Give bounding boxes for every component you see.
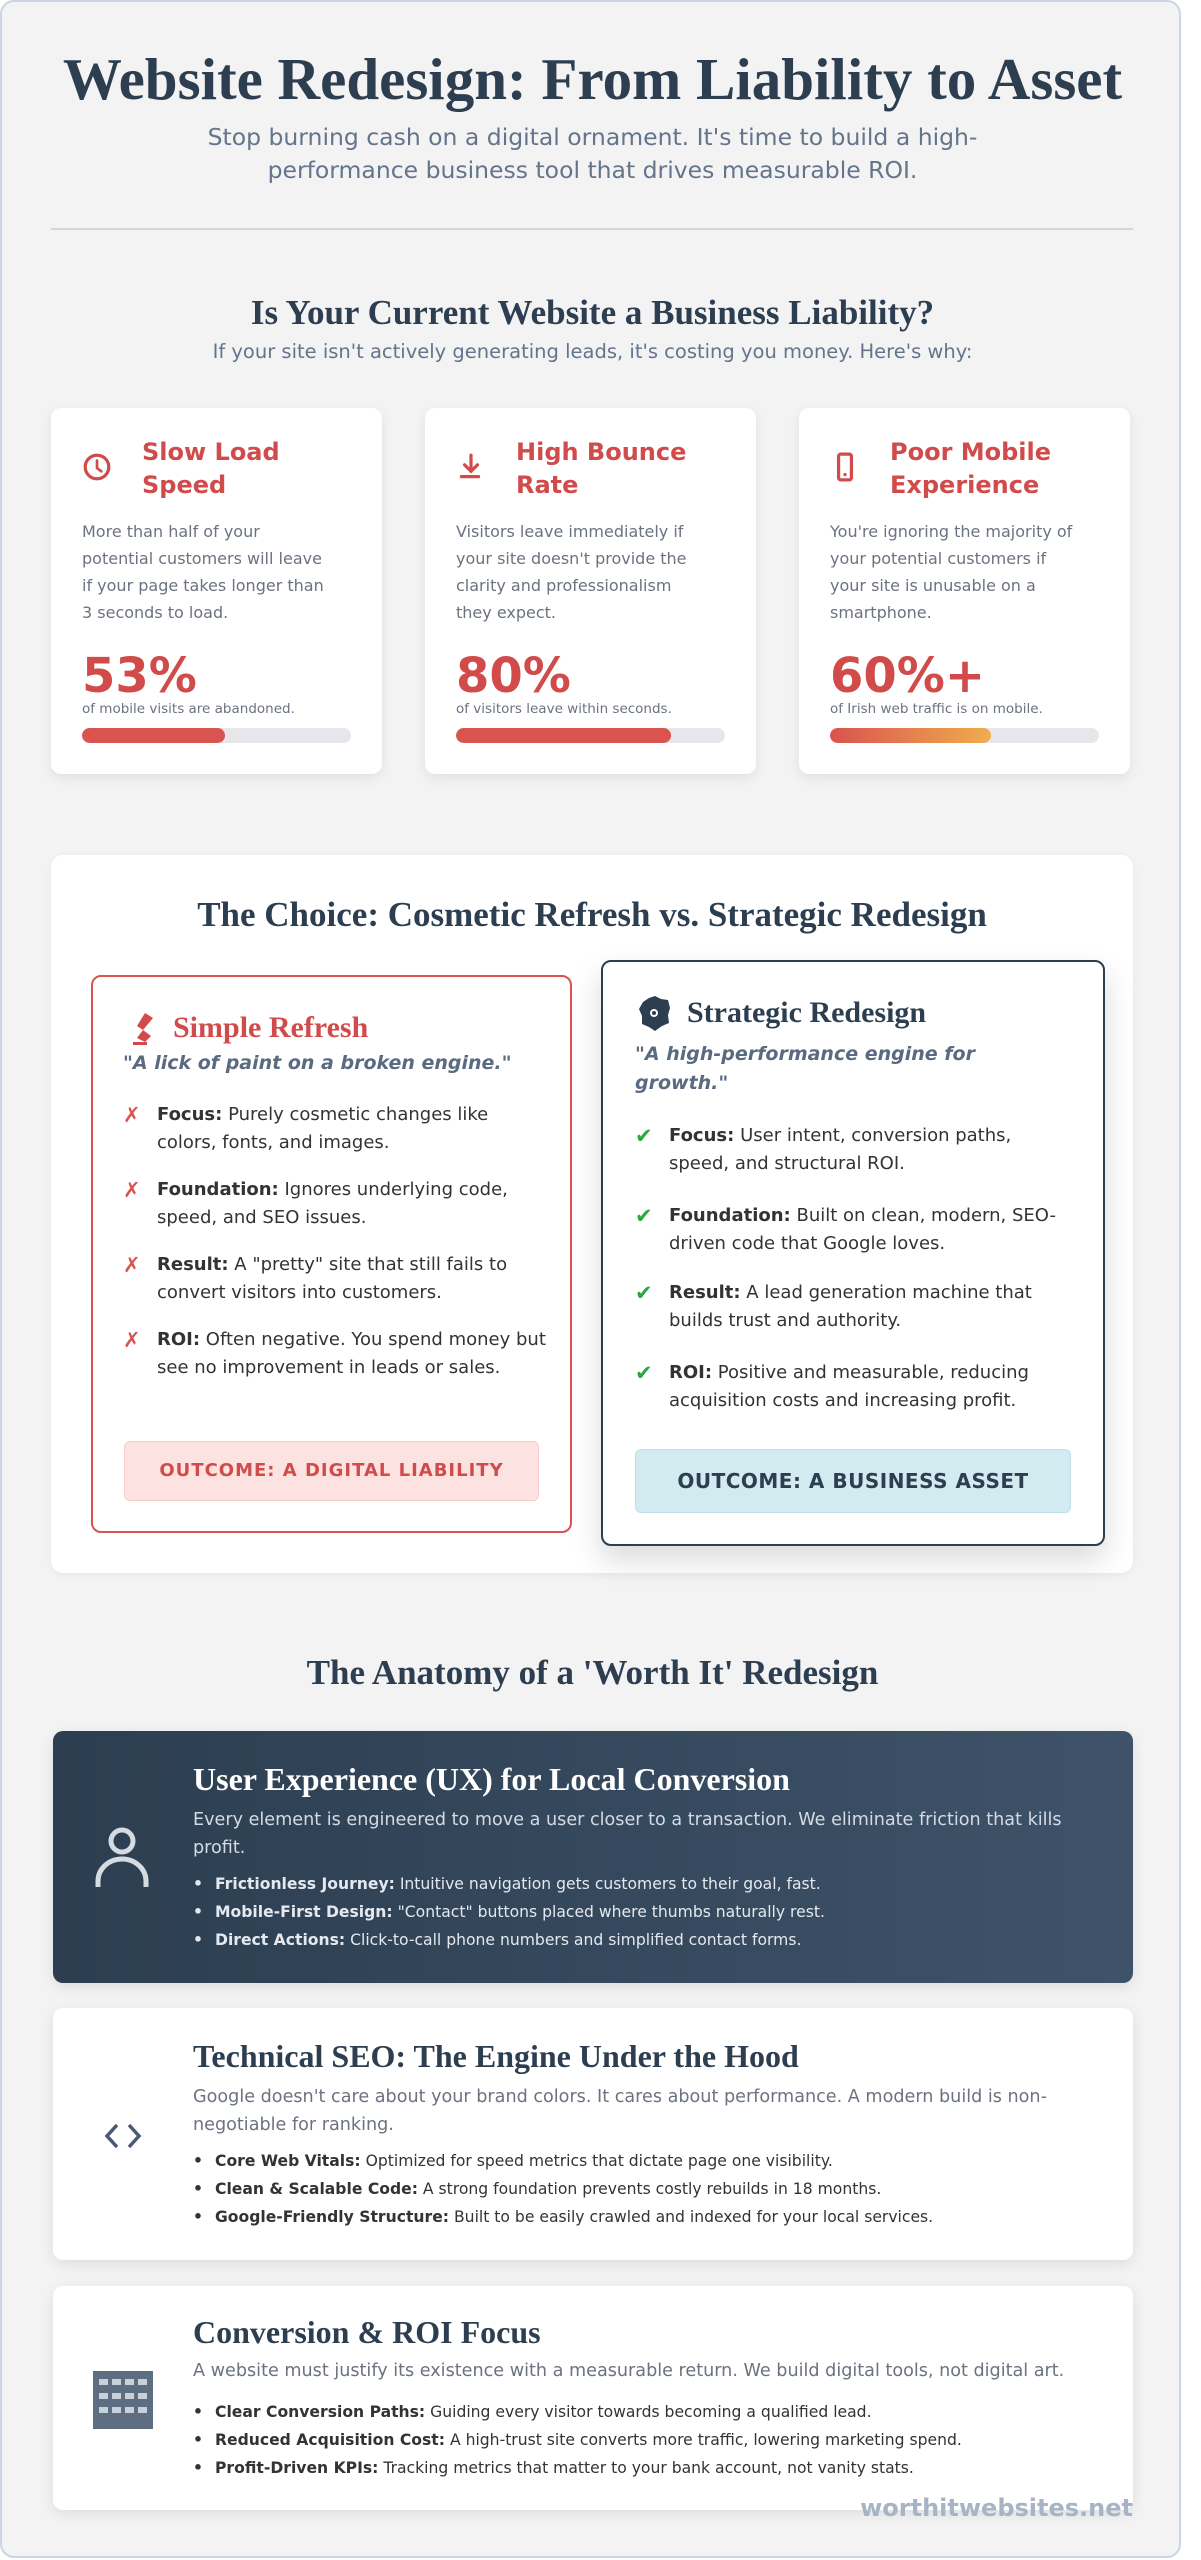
box: strategic redesign: Strategic Redesign — [687, 996, 926, 1029]
item list: ✔ — [635, 1281, 653, 1305]
box: simple refresh — [91, 975, 572, 1533]
card: high bounce rate: 80% — [456, 648, 571, 704]
icon: phone — [836, 452, 854, 482]
feature: technical SEO — [53, 2008, 1133, 2260]
card: high bounce rate: Rate — [516, 471, 578, 499]
card: slow load speed: 53% — [82, 648, 197, 704]
item list — [635, 1124, 1056, 1411]
item list: ✔ — [635, 1361, 653, 1385]
feature: UX — [53, 1731, 1133, 1983]
icon: user — [96, 1828, 148, 1887]
feature: UX: Frictionless Journey: Intuitive navigation gets customers to their goal, fast. — [215, 1875, 821, 1893]
box: simple refresh: "A lick of paint on a broken engine." — [123, 1052, 512, 1074]
card: slow load speed — [51, 408, 382, 774]
feature: UX: User Experience (UX) for Local Conversion — [193, 1761, 790, 1797]
feature: conversion & ROI: Profit-Driven KPIs: Tracking metrics that matter to your bank account, not vanity stats. — [215, 2459, 914, 2477]
outcome: digital liability: OUTCOME: A DIGITAL LIABILITY — [159, 1460, 504, 1481]
box: strategic redesign — [601, 960, 1105, 1546]
item list: ✗ — [123, 1253, 141, 1277]
panel: the choice — [51, 855, 1133, 1573]
card: poor mobile experience: 60%+ — [830, 648, 985, 704]
item list — [123, 1103, 546, 1378]
item list: ✗ — [123, 1103, 141, 1127]
card: slow load speed: Speed — [142, 471, 226, 499]
feature: technical SEO: Clean & Scalable Code: A strong foundation prevents costly rebuilds in 18 months. — [215, 2180, 881, 2198]
icon: building grid — [93, 2371, 153, 2429]
outcome: digital liability — [124, 1441, 539, 1501]
feature: UX: Mobile-First Design: "Contact" buttons placed where thumbs naturally rest. — [215, 1903, 825, 1921]
card: high bounce rate — [425, 408, 756, 774]
card: poor mobile experience: of Irish web traffic is on mobile. — [830, 701, 1043, 717]
box: simple refresh: Simple Refresh — [173, 1011, 368, 1044]
card: poor mobile experience: Poor Mobile — [890, 438, 1051, 466]
feature: conversion & ROI: A website must justify its existence with a measurable return. We build digital tools, not digital art. — [193, 2361, 1064, 2381]
item list: ✔ — [635, 1124, 653, 1148]
item list: ✔ — [635, 1204, 653, 1228]
title: Website Redesign: From Liability to Asset — [63, 46, 1122, 112]
item list: ✗ — [123, 1328, 141, 1352]
section subtext: If your site isn't actively generating leads, it's costing you money. Here's why: — [213, 340, 972, 363]
outcome: business asset — [635, 1449, 1071, 1513]
feature: UX: Every element is engineered to move a user closer to a transaction. We eliminate friction that kills profit. — [193, 1810, 1062, 1858]
item list: ✗ — [123, 1178, 141, 1202]
feature: UX: Direct Actions: Click-to-call phone numbers and simplified contact forms. — [215, 1931, 801, 1949]
item list: Focus: Purely cosmetic changes like colors, fonts, and images. — [157, 1104, 488, 1153]
outcome: business asset: OUTCOME: A BUSINESS ASSET — [677, 1469, 1029, 1493]
item list: Foundation: Ignores underlying code, speed, and SEO issues. — [157, 1179, 508, 1228]
feature: conversion & ROI: Clear Conversion Paths: Guiding every visitor towards becoming a qualified lead. — [215, 2403, 872, 2421]
icon: brush — [133, 1013, 153, 1045]
box: strategic redesign: "A high-performance engine for growth." — [635, 1043, 975, 1094]
item list: Result: A lead generation machine that builds trust and authority. — [669, 1282, 1032, 1331]
card: poor mobile experience: Experience — [890, 471, 1039, 499]
feature: technical SEO: Technical SEO: The Engine Under the Hood — [193, 2038, 799, 2074]
subtitle: Stop burning cash on a digital ornament. It's time to build a high-performance business tool that drives measurable ROI. — [208, 123, 977, 184]
item list: Focus: User intent, conversion paths, speed, and structural ROI. — [669, 1125, 1011, 1174]
item list: Foundation: Built on clean, modern, SEO-driven code that Google loves. — [669, 1205, 1056, 1254]
feature: conversion & ROI: Reduced Acquisition Cost: A high-trust site converts more traffic, lowering marketing spend. — [215, 2431, 962, 2449]
feature: technical SEO: Google doesn't care about your brand colors. It cares about performance. A modern build is non-negotiable for ranking. — [193, 2087, 1047, 2135]
section heading: liability: Is Your Current Website a Business Liability? — [251, 293, 934, 332]
card: slow load speed: More than half of your potential customers will leave if your page takes longer than 3 seconds to load. — [82, 522, 324, 622]
icon: clock — [84, 454, 110, 480]
heading: the choice: The Choice: Cosmetic Refresh vs. Strategic Redesign — [197, 895, 987, 934]
icon: code — [104, 2124, 142, 2148]
feature: technical SEO: Google-Friendly Structure: Built to be easily crawled and indexed for your local services. — [215, 2208, 933, 2226]
card: poor mobile experience — [799, 408, 1130, 774]
icon: gear — [639, 996, 670, 1031]
feature: conversion & ROI: Conversion & ROI Focus — [193, 2314, 541, 2350]
card: slow load speed: of mobile visits are abandoned. — [82, 701, 295, 717]
item list: ROI: Often negative. You spend money but see no improvement in leads or sales. — [157, 1329, 546, 1378]
feature: conversion & ROI — [53, 2286, 1133, 2510]
section heading: anatomy: The Anatomy of a 'Worth It' Redesign — [307, 1653, 878, 1692]
card: slow load speed: Slow Load — [142, 438, 280, 466]
item list: Result: A "pretty" site that still fails to convert visitors into customers. — [157, 1254, 507, 1303]
feature: technical SEO: Core Web Vitals: Optimized for speed metrics that dictate page one visibility. — [215, 2152, 833, 2170]
card: high bounce rate: of visitors leave within seconds. — [456, 701, 672, 717]
icon: download arrow — [460, 454, 480, 478]
card: high bounce rate: Visitors leave immediately if your site doesn't provide the clarity and professionalism they expect. — [456, 522, 686, 622]
footer: brand: worthitwebsites.net — [860, 2494, 1133, 2522]
card: high bounce rate: High Bounce — [516, 438, 686, 466]
item list: ROI: Positive and measurable, reducing acquisition costs and increasing profit. — [669, 1362, 1029, 1411]
card: poor mobile experience: You're ignoring the majority of your potential customers if your site is unusable on a smartphone. — [830, 522, 1072, 622]
